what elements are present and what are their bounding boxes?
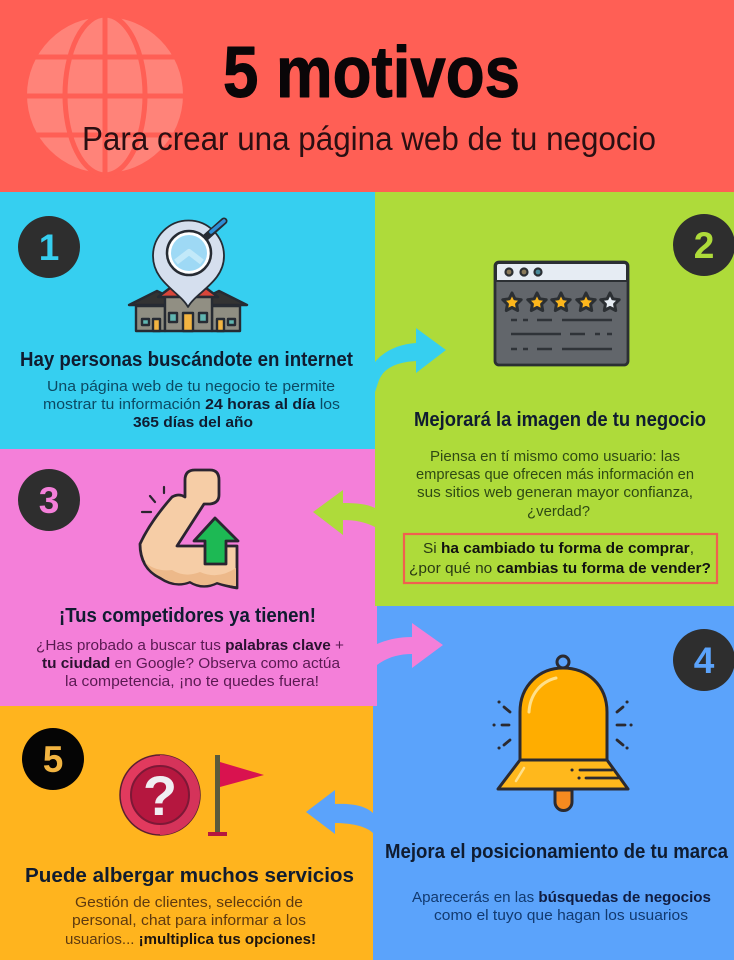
- text block 1: mostrar tu información 24 horas al día los: [43, 397, 340, 413]
- panel: 2 image: [375, 192, 734, 606]
- badge 1: 1: [39, 227, 59, 268]
- text block 5: usuarios... ¡multiplica tus opciones!: [65, 932, 316, 948]
- text block 2: Piensa en tí mismo como usuario: las: [430, 449, 680, 465]
- text block 3: [36, 638, 344, 690]
- panel: 4 brand positioning: [373, 606, 734, 960]
- panel: header: [0, 0, 734, 192]
- callout: ¿por qué no cambias tu forma de vender?: [409, 561, 711, 577]
- icon: houses with search pin: [129, 220, 247, 331]
- badge 2: 2: [694, 225, 714, 266]
- badge 3: [18, 469, 80, 531]
- arrow: 1 to 2: [375, 328, 446, 392]
- text block 5: [65, 895, 316, 948]
- panel: 1 people searching: [0, 192, 375, 449]
- icon: question coin: ?: [143, 764, 177, 827]
- heading 5: Puede albergar muchos servicios: [25, 865, 354, 887]
- callout: Si ha cambiado tu forma de comprar ,: [423, 541, 694, 557]
- panel: 3 competitors: [0, 449, 377, 706]
- text block 1: [43, 379, 340, 431]
- text block 4: [412, 890, 711, 924]
- arrow: 3 to 4: [377, 623, 443, 668]
- text block 2: ¿verdad?: [527, 504, 590, 520]
- icon: flexed arm with arrow: [140, 470, 238, 588]
- badge 1: [18, 216, 80, 278]
- text block 5: personal, chat para informar a los: [72, 913, 306, 929]
- callout: [404, 534, 717, 583]
- badge 4: 4: [694, 640, 715, 681]
- badge 5: [22, 728, 84, 790]
- text block 5: Gestión de clientes, selección de: [75, 895, 303, 911]
- icon: bell: [494, 656, 631, 810]
- badge 5: 5: [43, 739, 63, 780]
- icon: browser with star rating: [495, 262, 628, 365]
- text block 3: tu ciudad en Google? Observa como actúa: [42, 656, 341, 672]
- icon: flag: [208, 755, 264, 836]
- text block 1: Una página web de tu negocio te permite: [47, 379, 335, 395]
- badge 4: [673, 629, 734, 691]
- badge 2: [673, 214, 734, 276]
- text block 1: 365 días del año: [133, 415, 253, 431]
- arrow: 4 to 5: [306, 790, 373, 834]
- heading 1: Hay personas buscándote en internet: [20, 349, 353, 371]
- text block 2: sus sitios web generan mayor confianza,: [417, 485, 693, 501]
- subtitle: Para crear una página web de tu negocio: [82, 120, 656, 157]
- text block 3: la competencia, ¡no te quedes fuera!: [65, 674, 319, 690]
- text block 2: [416, 449, 694, 520]
- panel: 5 many services: [0, 706, 373, 960]
- text block 2: empresas que ofrecen más información en: [416, 467, 694, 483]
- icon: question coin: [120, 755, 200, 835]
- text block 4: como el tuyo que hagan los usuarios: [434, 908, 688, 924]
- text block 3: ¿Has probado a buscar tus palabras clave +: [36, 638, 344, 654]
- heading 2: Mejorará la imagen de tu negocio: [414, 409, 706, 431]
- heading 3: ¡Tus competidores ya tienen!: [59, 605, 316, 627]
- icon: globe: [20, 15, 190, 175]
- title: 5 motivos: [223, 33, 520, 113]
- arrow: 2 to 3: [313, 490, 375, 535]
- badge 3: 3: [39, 480, 59, 521]
- text block 4: Aparecerás en las búsquedas de negocios: [412, 890, 711, 906]
